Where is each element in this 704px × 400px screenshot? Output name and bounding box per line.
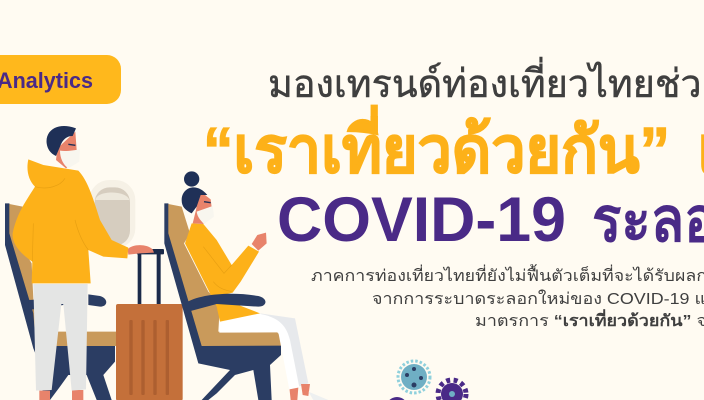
icon: dark virus [386, 397, 408, 400]
floor shadow [308, 392, 328, 400]
body text: ภาคการท่องเที่ยวไทยที่ยังไม่ฟื้นตัวเต็มที่จะได้รับผลก [311, 264, 704, 285]
woman [182, 171, 310, 400]
title line 3: COVID-19 [277, 185, 566, 255]
man [13, 126, 154, 400]
title line 3 [277, 185, 704, 255]
left seat [5, 203, 117, 400]
illustration: passengers [5, 126, 328, 400]
airplane window [89, 180, 135, 248]
luggage [116, 249, 183, 400]
body text [311, 264, 704, 330]
body text: มาตรการ “เราเที่ยวด้วยกัน” จ [475, 309, 704, 330]
icon: purple virus [438, 380, 466, 400]
body text: จากการระบาดระลอกใหม่ของ COVID-19 แ [372, 289, 704, 308]
title line 2: “เราเที่ยวด้วยกัน” [203, 105, 670, 186]
right seat [164, 203, 281, 400]
icon: blue virus [398, 361, 430, 393]
badge: Analytics [0, 55, 121, 104]
